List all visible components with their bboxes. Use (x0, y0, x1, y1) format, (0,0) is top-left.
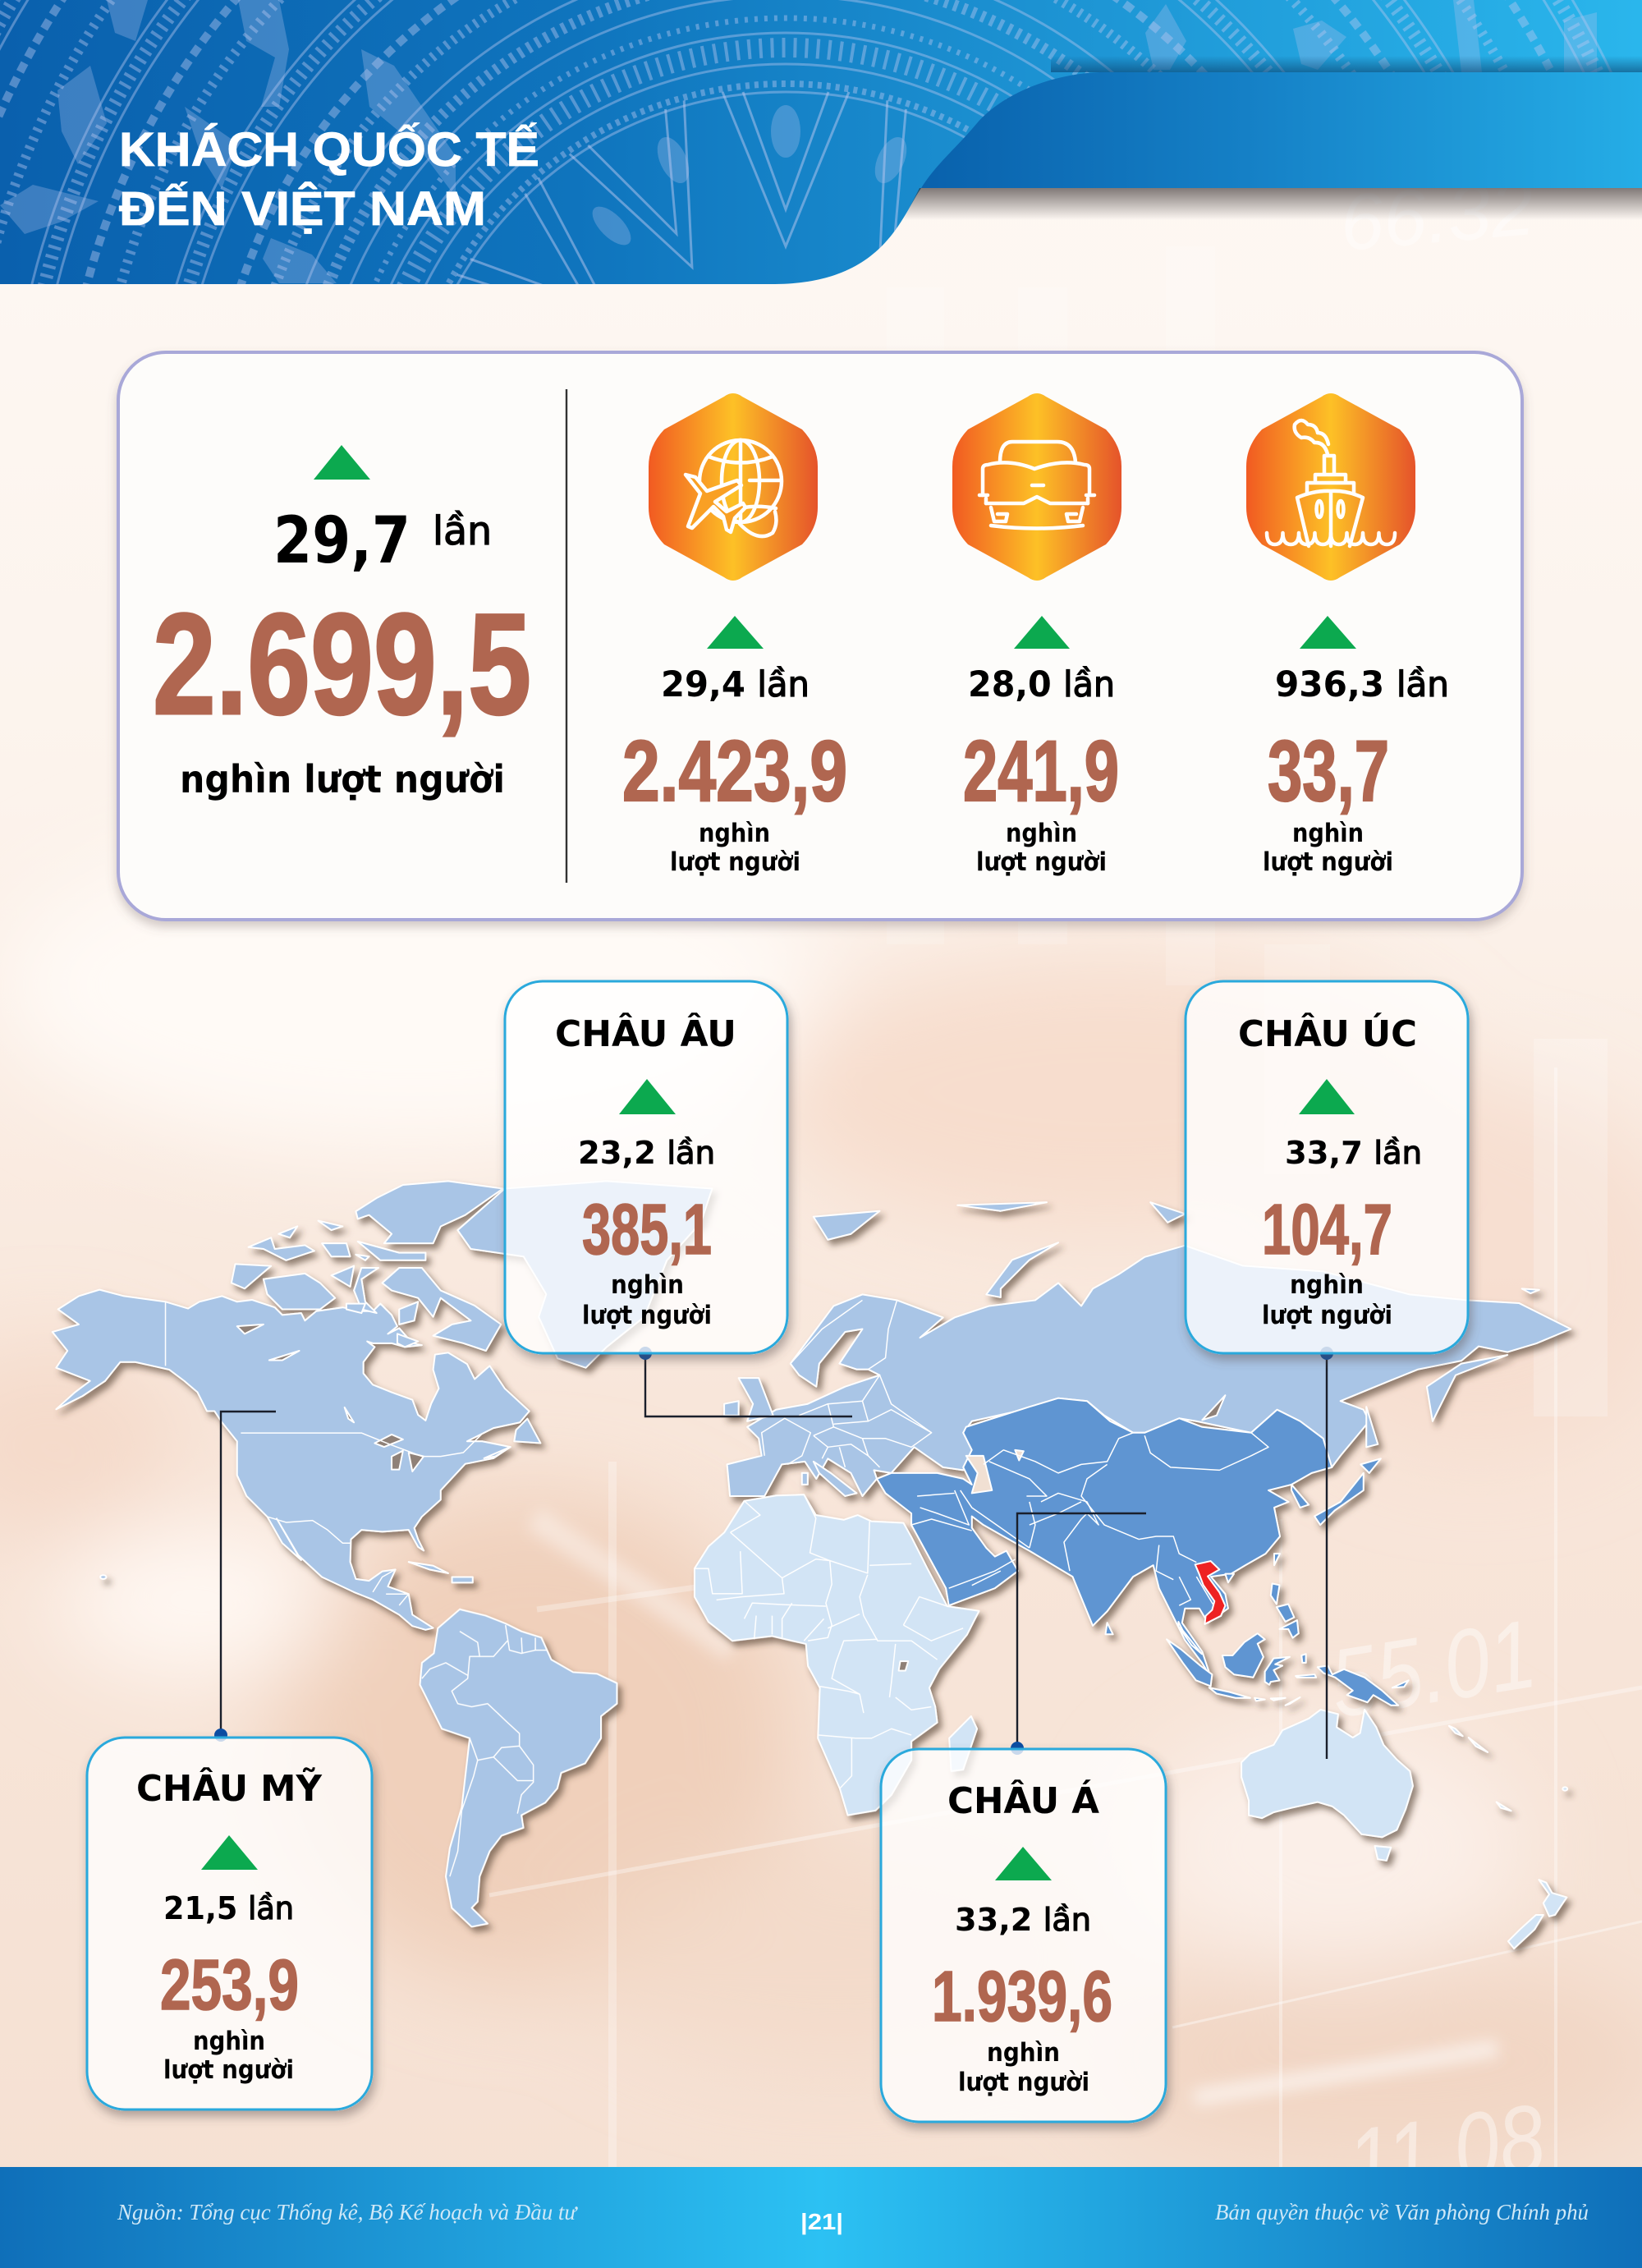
arrow (1299, 1079, 1355, 1114)
map: Europe and Russia (724, 1202, 1571, 1496)
arrow (619, 1079, 676, 1114)
arrow (1014, 616, 1070, 649)
map: North America (53, 1181, 712, 1630)
multiple: 21,5 lần (163, 1890, 294, 1926)
map: South America (420, 1609, 617, 1926)
unit: nghìn (1290, 1270, 1364, 1300)
ghost number 66.32: 66.32 (1337, 163, 1537, 268)
footer (0, 2167, 1642, 2268)
card title: CHÂU ÂU (555, 1012, 736, 1055)
total: unit: nghìn lượt người (180, 757, 505, 801)
column: road (952, 393, 1121, 877)
value: 104,7 (1262, 1190, 1392, 1269)
source note: Nguồn: Tổng cục Thống kê, Bộ Kế hoạch và Đầu tư (117, 2200, 578, 2224)
unit (163, 2027, 294, 2085)
header banner (0, 0, 1642, 284)
ghost number 14: 14 (1449, 650, 1523, 738)
arrow (707, 616, 764, 649)
multiple: 936,3 lần (1275, 664, 1449, 705)
unit: nghìn (611, 1270, 684, 1300)
arrow (1300, 616, 1356, 649)
panel: total international visitors (118, 352, 1522, 920)
arrow (995, 1847, 1052, 1880)
column: air (622, 393, 847, 877)
unit (582, 1270, 712, 1330)
unit: lượt người (163, 2055, 294, 2085)
value: 385,1 (582, 1190, 712, 1269)
title: KHÁCH QUỐC TẾ (119, 123, 539, 177)
title (119, 123, 539, 236)
unit (976, 819, 1107, 877)
unit: lượt người (976, 847, 1107, 877)
multiple: 33,7 lần (1285, 1135, 1422, 1171)
icon: ship (1246, 393, 1415, 581)
map: Africa (695, 1494, 979, 1816)
connector: Asia (1011, 1513, 1146, 1755)
unit: nghìn (1006, 819, 1077, 848)
card title: CHÂU ÚC (1238, 1012, 1417, 1055)
ribbon (921, 72, 1642, 188)
unit: lượt người (1263, 847, 1393, 877)
value: 33,7 (1268, 723, 1389, 820)
unit (1262, 1270, 1392, 1330)
card title: CHÂU MỸ (136, 1766, 323, 1810)
connector: Europe (639, 1347, 852, 1416)
ghost number 55.01: 55.01 (1323, 1600, 1543, 1738)
icon: globe and plane (649, 393, 818, 581)
total: multiple: 29,7 (273, 504, 410, 578)
unit: nghìn (1292, 819, 1364, 848)
value: 241,9 (963, 723, 1119, 820)
unit: lượt người (1262, 1301, 1392, 1330)
page number: |21| (800, 2209, 843, 2234)
column: sea (1246, 393, 1449, 877)
world map (53, 1181, 1571, 1949)
unit: nghìn (699, 819, 770, 848)
unit: lượt người (670, 847, 800, 877)
unit (1263, 819, 1393, 877)
map: Vietnam highlighted (1195, 1561, 1225, 1624)
icon: car (952, 393, 1121, 581)
connector: Australia (1320, 1347, 1333, 1759)
value: 2.423,9 (622, 723, 847, 820)
unit: lượt người (582, 1301, 712, 1330)
map: Asia (877, 1398, 1381, 1678)
copyright note: Bản quyền thuộc về Văn phòng Chính phủ (1215, 2200, 1589, 2224)
unit: nghìn (987, 2038, 1060, 2068)
total: value: 2.699,5 (153, 585, 531, 745)
card title: CHÂU Á (947, 1779, 1099, 1822)
total: multiple: lần (433, 508, 492, 554)
unit: lượt người (958, 2068, 1089, 2097)
card: Asia (881, 1749, 1166, 2122)
unit (670, 819, 800, 877)
multiple: 28,0 lần (968, 664, 1115, 705)
multiple: 29,4 lần (661, 664, 810, 705)
map: Southeast Asia islands (1167, 1584, 1409, 1706)
title: ĐẾN VIỆT NAM (119, 182, 486, 236)
card: America (87, 1738, 372, 2110)
unit (958, 2038, 1089, 2097)
value: 1.939,6 (932, 1957, 1112, 2036)
value: 253,9 (160, 1945, 299, 2025)
map: Oceania (1241, 1710, 1567, 1949)
card: Europe (505, 981, 787, 1353)
connector: America (214, 1412, 276, 1742)
total: increase arrow (314, 445, 370, 480)
ghost number 11.08: 11.08 (1341, 2084, 1551, 2219)
multiple: 23,2 lần (578, 1135, 715, 1171)
unit: nghìn (193, 2027, 265, 2056)
card: Australia (1186, 981, 1468, 1353)
arrow (201, 1835, 258, 1870)
multiple: 33,2 lần (955, 1902, 1091, 1938)
